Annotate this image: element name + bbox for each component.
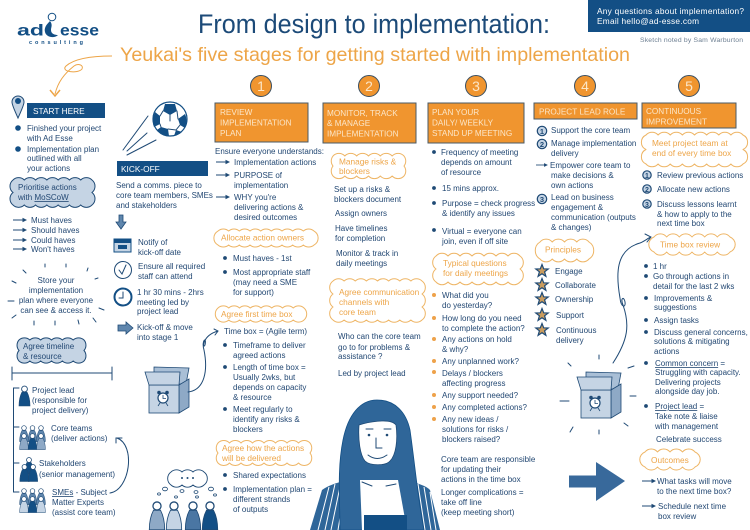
callout: typical questions: Typical questions (443, 258, 507, 268)
callout: agree first time box (215, 306, 307, 322)
start bullets: your actions (27, 164, 70, 173)
list: lead responsibilities: delivery (551, 149, 579, 158)
list: meeting agenda (643, 171, 743, 228)
list: review items: = (718, 359, 725, 368)
arrow: subtitle to start (50, 56, 112, 96)
text: notify: kick-off date (138, 248, 182, 257)
list: lead responsibilities: Manage implementation (551, 139, 636, 148)
callout: allocate action owners: Allocate action owners (221, 232, 304, 242)
big arrow (569, 462, 625, 501)
callout: agree communication channels (330, 279, 425, 322)
list: delivery: Shared expectations (233, 471, 306, 480)
callout: agree timeline (17, 338, 86, 363)
text: SMEs: (assist core team) (52, 508, 116, 517)
list: principles (536, 264, 596, 345)
icon: box with alarm clock and rays (560, 355, 636, 434)
list: meeting agenda: Discuss lessons learnt (657, 200, 737, 209)
callout: principles: Principles (545, 244, 581, 254)
list: lead responsibilities: Empower core team to (550, 161, 631, 170)
callout: outcomes: Outcomes (651, 455, 689, 465)
list: owners (223, 254, 311, 297)
text: core team responsibility: (keep meeting short) (441, 508, 515, 517)
icon: group of people (149, 502, 218, 530)
heading: stage 5: CONTINUOUS (646, 107, 702, 116)
list: review items: solutions & mitigating (654, 337, 730, 346)
list: risk tasks: daily meetings (336, 259, 387, 268)
text: ensure understanding: WHY you're (234, 193, 277, 202)
text: project lead: (responsible for (32, 396, 87, 405)
stage numbers: 4 (581, 78, 589, 94)
text: project lead: project delivery) (32, 406, 89, 415)
text: who can help: Who can the core team (338, 332, 421, 341)
heading: stage 1: IMPLEMENTATION (220, 118, 292, 128)
list: delivery: Implementation plan = (233, 485, 312, 494)
heading: stage 3: DAILY/ WEEKLY (432, 118, 494, 128)
heading: stage 2 (323, 103, 416, 143)
text: who can help: Led by project lead (338, 369, 406, 378)
text: who can help: go to for problems & (338, 343, 411, 352)
list: review items: = (697, 402, 704, 411)
heading: stage 2: MONITOR, TRACK (327, 109, 398, 118)
panel: stage 2 monitor (310, 103, 440, 530)
callout: time box review: Time box review (660, 240, 721, 250)
callout: agree communication channels: Agree communication (339, 287, 420, 297)
text: send comms: Send a comms. piece to (116, 181, 202, 190)
list: meeting agenda: 3 (645, 202, 649, 209)
list: risk tasks: blockers document (334, 195, 402, 204)
heading: stage 5 (642, 103, 736, 128)
callout: typical questions: for daily meetings (443, 268, 508, 278)
callout: principles (535, 239, 594, 262)
list: lead responsibilities: own actions (551, 181, 593, 190)
text: meeting: 1 hr 30 mins - 2hrs (137, 288, 204, 297)
heading: stage 3: STAND UP MEETING (432, 129, 512, 138)
icon: clock (114, 288, 132, 306)
callout: meet project team (641, 132, 748, 167)
list: review items: alongside day job. (655, 387, 720, 396)
text: ensure understanding: desired outcomes (234, 213, 297, 222)
heading: stage 1: REVIEW (220, 108, 253, 117)
text: SMEs: SMEs (52, 488, 73, 497)
callout: meet project team: end of every time box (652, 148, 732, 158)
list: MoSCoW: Must haves (31, 216, 72, 225)
start bullets: outlined with all (27, 154, 82, 163)
list: risk tasks: Monitor & track in (336, 249, 398, 258)
list: meeting guidance (432, 148, 535, 246)
text: core team responsibility: for updating their (441, 465, 501, 474)
list: risk tasks: Have timelines (335, 224, 387, 233)
stage numbers: 3 (472, 78, 480, 94)
list: MoSCoW: Won't haves (31, 245, 75, 254)
list: review items: actions (654, 347, 679, 356)
text: who can help: assistance ? (338, 352, 383, 361)
list: review items: suggestions (654, 303, 697, 312)
contact box: Any questions about implementation? (597, 6, 744, 16)
start bullets: with Ad Esse (26, 134, 73, 143)
list: meeting agenda: & how to apply to the (657, 210, 732, 219)
heading: stage 4 (534, 103, 637, 119)
icon: calendar (114, 239, 131, 252)
list: delivery: of outputs (233, 505, 268, 514)
credit: Sketch noted by Sam Warburton (640, 37, 743, 44)
list: principles: Collaborate (555, 281, 596, 290)
callout: typical questions (433, 253, 523, 285)
list: daily questions: Any unplanned work? (442, 357, 519, 366)
list: meeting guidance: 15 mins approx. (442, 184, 499, 193)
callout: agree first time box: Agree first time box (221, 309, 293, 319)
note: store plan: plan where everyone (19, 296, 94, 305)
list: MoSCoW: Should haves (31, 226, 79, 235)
list: risk tasks: Assign owners (335, 209, 387, 218)
list: principles: Continuous (556, 326, 596, 335)
icon: stakeholders (20, 458, 38, 481)
note: store plan: can see & access it. (20, 306, 92, 315)
text: project lead: Project lead (32, 386, 74, 395)
heading: stage 2: & MANAGE (327, 119, 371, 128)
list: MoSCoW: Could haves (31, 236, 75, 245)
list: owners: (may need a SME (233, 278, 297, 287)
list: review items (644, 262, 748, 444)
text: ensure understanding: PURPOSE of (234, 171, 283, 180)
list: lead responsibilities: 3 (540, 195, 544, 204)
icon: football (123, 102, 187, 155)
text: core team responsibility: actions in the time box (441, 475, 521, 484)
note: store plan (8, 264, 104, 325)
list: lead responsibilities: Support the core team (551, 126, 630, 135)
list: review items: Project lead (655, 402, 697, 411)
arrow: SMEs to core team (110, 438, 129, 493)
heading: start here (27, 103, 105, 118)
start bullets: Implementation plan (27, 145, 99, 154)
panel: stage 1 review (214, 103, 324, 514)
text: core team responsibility: take off line (441, 498, 482, 507)
text: notify: Notify of (138, 238, 168, 247)
list: outcomes: to the next time box? (657, 487, 732, 496)
contact box (588, 0, 750, 32)
list: lead responsibilities: 2 (540, 140, 544, 149)
list: daily questions: How long do you need (442, 314, 522, 323)
list: daily questions: blockers raised? (442, 435, 501, 444)
text: ensure understanding: Ensure everyone understands: (215, 147, 324, 156)
heading: stage 5: IMPROVEMENT (646, 118, 707, 126)
heading: stage 2: IMPLEMENTATION (327, 130, 399, 138)
list: lead responsibilities: Lead on business (551, 193, 614, 202)
panel: stage 4 project lead (534, 103, 651, 501)
list: MoSCoW (13, 216, 79, 254)
icon: map pin (12, 96, 24, 118)
icon: box with alarm clock (145, 367, 189, 413)
heading: stage 3: PLAN YOUR (432, 108, 479, 117)
text: ensure understanding: implementation (234, 181, 288, 190)
list: review items: Take note & liaise (655, 412, 718, 421)
text: send comms: and stakeholders (116, 201, 177, 210)
heading: kick-off: KICK-OFF (121, 164, 160, 174)
panel: start here (8, 96, 129, 517)
icon: down arrow (116, 215, 126, 229)
list: outcomes (642, 477, 732, 521)
list: meeting guidance: & identify any issues (442, 209, 515, 218)
callout: agree communication channels: channels with (339, 297, 390, 307)
icon: right arrow (118, 322, 133, 334)
callout: allocate action owners (214, 229, 318, 247)
illustration: woman (310, 400, 440, 530)
list: meeting agenda: Review previous actions (657, 171, 743, 180)
list: daily questions: to complete the action? (442, 324, 525, 333)
list: review items: Common concern (655, 359, 718, 368)
list: daily questions: Any new ideas / (442, 415, 499, 424)
text: kick-off move: into stage 1 (137, 333, 179, 342)
heading: stage 1 (215, 103, 308, 142)
team tree (14, 388, 19, 492)
list: daily questions: Any support needed? (442, 391, 519, 400)
callout: agree timeline: Agree timeline (23, 342, 75, 351)
timeline bar (12, 367, 112, 380)
heading: stage 3 (428, 103, 524, 143)
callout: meet project team: Meet project team at (652, 138, 728, 148)
text: core teams: Core teams (51, 424, 92, 433)
list: meeting guidance: depends on amount (441, 158, 512, 167)
icon: project lead (19, 386, 30, 406)
list: lead responsibilities: 1 (540, 127, 544, 136)
text: kick-off move: Kick-off & move (137, 323, 193, 332)
list: meeting guidance: join, even if off site (441, 237, 509, 246)
list: meeting guidance: Purpose = check progress (442, 199, 535, 208)
list: principles: delivery (556, 336, 584, 345)
panel: stage 5 continuous improvement (640, 103, 748, 521)
start bullets: Finished your project (27, 124, 102, 133)
icon: check (114, 262, 132, 278)
list: daily questions: Any actions on hold (442, 335, 512, 344)
list: risk tasks: for completion (335, 234, 385, 243)
icon: thought cloud (158, 470, 216, 498)
arrow: box to stage 1 (188, 329, 218, 392)
list: time box: Usually 2wks, but (233, 373, 296, 382)
list: time box: Time box = (Agile term) (224, 327, 307, 336)
list: review items: with management (654, 422, 719, 431)
list: delivery (223, 471, 312, 514)
list: daily questions: do yesterday? (442, 301, 493, 310)
text: ensure understanding: Implementation actions (234, 158, 316, 167)
list: review items: Celebrate success (656, 435, 722, 444)
list: principles: Ownership (555, 295, 594, 304)
list: review items: Discuss general concerns, (654, 328, 748, 337)
callout: prioritise actions: MoSCoW (34, 193, 69, 202)
heading: kick-off (117, 161, 208, 176)
list: review items: Improvements & (654, 294, 713, 303)
text: core team responsibility: Longer complications = (441, 488, 524, 497)
text: core teams: (deliver actions) (51, 434, 108, 443)
list: review items: Assign tasks (654, 316, 699, 325)
contact box: Email hello@ad-esse.com (597, 16, 699, 26)
list: meeting agenda: next time box (657, 219, 705, 228)
text: ensure understanding: delivering actions & (234, 203, 304, 212)
note: store plan: implementation (29, 286, 83, 295)
text: SMEs: Matter Experts (52, 498, 104, 507)
stage numbers (250, 76, 700, 96)
list: meeting guidance: Virtual = everyone can (442, 227, 522, 236)
list: meeting agenda: 2 (645, 187, 649, 194)
list: meeting agenda: Allocate new actions (657, 185, 730, 194)
text: meeting: project lead (137, 307, 178, 316)
panel: stage 3 plan (428, 103, 536, 517)
list: time box: identify any risks & (233, 415, 300, 424)
list: time box: Meet regularly to (233, 405, 293, 414)
list: time box: depends on capacity (233, 383, 306, 392)
list: meeting guidance: Frequency of meeting (441, 148, 518, 157)
callout: outcomes (640, 449, 700, 470)
callout: agree how delivered (216, 441, 312, 465)
callout: prioritise actions (10, 178, 95, 207)
callout: manage risks (331, 153, 406, 179)
text: ensure: staff can attend (138, 272, 193, 281)
list: owners: Must haves - 1st (233, 254, 292, 263)
list: owners: Most appropriate staff (233, 268, 311, 277)
list: owners: for support) (233, 288, 274, 297)
list: outcomes: Schedule next time (658, 502, 727, 511)
text: stakeholders: Stakeholders (39, 459, 86, 468)
stage numbers: 5 (685, 78, 693, 94)
list: review items: 1 hr (653, 262, 667, 271)
text: send comms: core team members, SMEs (116, 191, 213, 200)
text: SMEs: - Subject (73, 488, 108, 497)
list: daily questions: affecting progress (442, 379, 505, 388)
heading: stage 1: PLAN (220, 129, 241, 138)
heading: start here: START HERE (33, 106, 85, 116)
stage numbers: 1 (257, 78, 265, 94)
list: principles: Support (556, 311, 585, 320)
list: review items: detail for the last 2 wks (653, 282, 734, 291)
callout: time box review (649, 234, 735, 255)
arrow: box to time box review (613, 234, 651, 363)
callout: manage risks: Manage risks & (339, 156, 397, 166)
text: core team responsibility: Core team are responsible (441, 455, 536, 464)
callout: agree how delivered: will be delivered (221, 453, 281, 463)
list: daily questions (432, 291, 527, 444)
callout: agree communication channels: core team (339, 307, 376, 317)
list: outcomes: box review (658, 512, 696, 521)
list: principles: Engage (555, 267, 583, 276)
logo: ad esse consulting: consulting (29, 40, 83, 46)
list: time box: agreed actions (233, 351, 285, 360)
list: time box: blockers (233, 425, 263, 434)
callout: agree timeline: & resource (23, 352, 62, 361)
list: risk tasks: Set up a risks & (334, 185, 391, 194)
callout: prioritise actions: with (17, 193, 34, 202)
icon: core team (20, 426, 45, 450)
list: time box: Length of time box = (233, 363, 306, 372)
list: time box: & resource (233, 393, 272, 402)
logo: ad esse consulting: esse (60, 22, 99, 40)
text: meeting: meeting led by (137, 298, 189, 307)
list: daily questions: & why? (442, 345, 469, 354)
list: meeting guidance: of resource (441, 168, 482, 177)
icon: SMEs (20, 489, 45, 513)
list: daily questions: solutions for risks / (442, 425, 509, 434)
note: store plan: Store your (38, 276, 75, 285)
list: lead responsibilities: engagement & (551, 203, 604, 212)
list: meeting agenda: 1 (645, 173, 649, 180)
text: ensure understanding (215, 147, 324, 222)
subtitle: Yeukai's five stages for getting started with implementation (120, 44, 630, 66)
list: outcomes: What tasks will move (657, 477, 732, 486)
list: daily questions: Delays / blockers (442, 369, 503, 378)
list: review items: Struggling with capacity. (655, 368, 741, 377)
logo: ad esse consulting (17, 13, 99, 46)
logo: ad esse consulting: ad (17, 22, 44, 40)
callout: agree how delivered: Agree how the actions (222, 443, 304, 453)
list: review items: Go through actions in (653, 272, 729, 281)
list: lead responsibilities: make decisions & (551, 171, 614, 180)
stage numbers: 2 (365, 78, 373, 94)
callout: manage risks: blockers (339, 166, 370, 176)
list: time box: Timeframe to deliver (233, 341, 306, 350)
list: lead responsibilities: communication (outputs (551, 213, 636, 222)
text: ensure: Ensure all required (138, 262, 205, 271)
title: From design to implementation: (198, 9, 550, 39)
list: delivery: different strands (233, 495, 290, 504)
list: review items: Delivering projects (655, 378, 721, 387)
panel: kick-off (114, 102, 218, 530)
start bullets (15, 124, 102, 173)
list: time box (223, 327, 307, 434)
list: lead responsibilities (536, 126, 636, 232)
heading: stage 4: PROJECT LEAD ROLE (539, 108, 626, 116)
list: daily questions: Any completed actions? (442, 403, 527, 412)
list: lead responsibilities: & changes) (551, 223, 592, 232)
callout: prioritise actions: Prioritise actions (18, 183, 77, 192)
text: stakeholders: (senior management) (39, 470, 115, 479)
list: daily questions: What did you (442, 291, 489, 300)
